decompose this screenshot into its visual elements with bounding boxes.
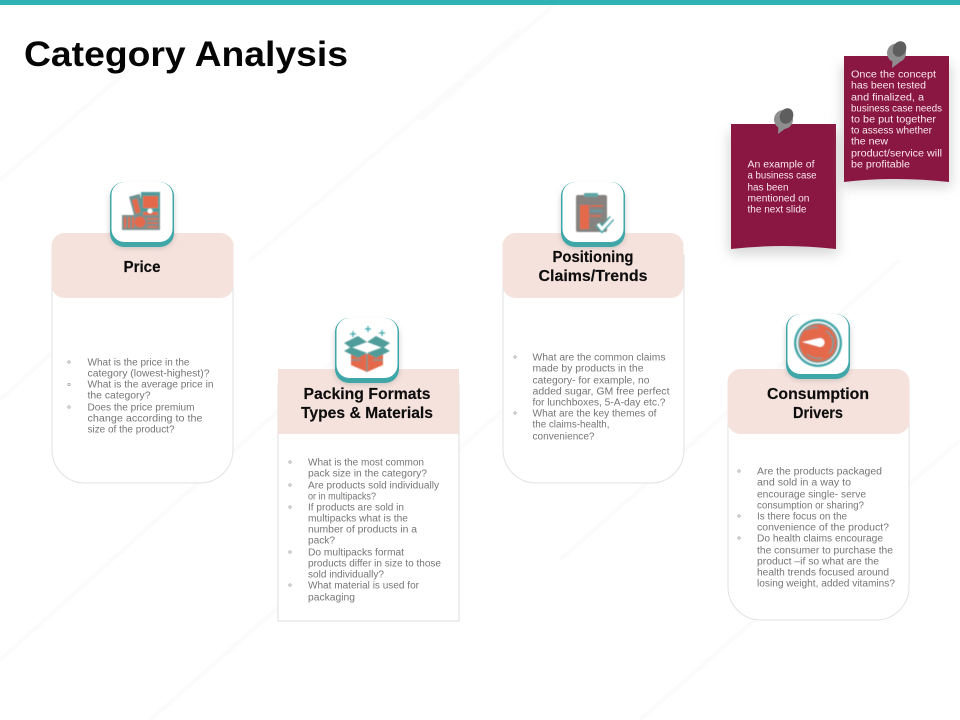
note text [748,160,817,216]
top accent bar [0,0,960,5]
text block: price questions: size of the product? [88,424,175,436]
text block: price questions: change according to the [88,414,203,424]
text block: consumption questions: encourage single- serve [757,490,866,500]
icon: money [110,182,174,248]
note text: Once the concept [851,70,936,80]
icon: pin [774,106,796,134]
text block: consumption questions: and sold in a way to [757,478,851,488]
text block: price questions: What is the price in the [88,358,190,368]
note text: the next slide [748,204,807,216]
title: Category Analysis [24,35,348,74]
text block: positioning questions: What are the common claims [532,352,666,364]
note text [851,70,942,170]
panel: price [52,182,234,483]
text block: positioning questions: category- for example, no [532,376,650,386]
heading: positioning claims [538,249,648,285]
text block: packing questions: Do multipacks format [308,548,404,558]
text block: positioning questions: added sugar, GM free perfect [532,386,670,398]
text block: packing questions [289,458,441,604]
panel: consumption drivers [728,314,910,620]
text block: consumption questions: Are the products packaged [757,466,882,478]
text block: consumption questions: product –if so what are the [757,556,879,568]
heading: positioning claims: Claims/Trends [538,268,648,285]
note text: product/service will [851,148,942,160]
text block: price questions [68,358,214,436]
note text: a business case [748,170,817,182]
text block: positioning questions: convenience? [532,432,595,442]
text block: packing questions: If products are sold in [308,502,404,514]
text block: positioning questions: What are the key themes of [532,408,657,420]
text block: consumption questions: Do health claims encourage [757,534,883,544]
text block: price questions: category (lowest-highest)? [88,368,210,380]
text block: price questions: the category? [88,390,151,402]
note text: mentioned on [748,194,810,204]
text block: consumption questions: consumption or sharing? [757,500,864,512]
heading: packing formats: Types & Materials [301,405,433,422]
text block: packing questions: multipacks what is the [308,514,408,524]
note text: the new [851,136,889,148]
text block: positioning questions [514,352,670,442]
text block: price questions: Does the price premium [88,402,194,414]
icon: clipboard [561,182,625,248]
text block: positioning questions: the claims-health, [532,420,610,430]
note text: to be put together [851,114,937,126]
text block: packing questions: What is the most common [308,458,424,468]
text block: packing questions: pack? [308,536,335,546]
text block: packing questions: or in multipacks? [308,492,376,502]
text block: price questions: What is the average price in [88,380,214,390]
text block: packing questions: packaging [308,592,355,604]
text block: consumption questions: health trends focused around [757,568,889,578]
icon: open box [335,318,399,384]
text block: consumption questions [738,466,895,590]
sticky note: concept finalized [842,39,951,187]
text block: packing questions: products differ in size to those [308,558,441,570]
text block: positioning questions: made by products in the [532,364,644,374]
text block: packing questions: Are products sold individually [308,480,439,492]
heading: consumption drivers: Consumption [767,386,869,403]
icon: gauge [786,314,850,380]
note text: An example of [748,160,815,170]
sticky note: business case example [729,106,838,254]
note text: has been [748,182,788,194]
heading: positioning claims: Positioning [552,249,634,266]
note text: has been tested [851,80,926,92]
note text: and finalized, a [851,92,924,104]
icon: pin [887,39,909,68]
heading: consumption drivers: Drivers [793,405,843,422]
text block: packing questions: What material is used for [308,580,420,592]
text block: positioning questions: for lunchboxes, 5-A-day etc.? [532,398,666,408]
note text: to assess whether [851,126,933,136]
text block: consumption questions: the consumer to purchase the [757,546,893,556]
text block: packing questions: number of products in a [308,524,417,536]
heading: packing formats: Packing Formats [304,386,431,403]
note text: business case needs [851,104,942,114]
heading: packing formats [301,386,433,422]
heading: price: Price [124,259,161,276]
text block: consumption questions: losing weight, added vitamins? [757,578,895,590]
text block: consumption questions: convenience of the product? [757,522,889,534]
text block: packing questions: pack size in the category? [308,468,427,480]
heading: consumption drivers [767,386,869,422]
note text: be profitable [851,160,910,170]
panel: packing formats [278,318,459,621]
panel: positioning claims [502,182,684,483]
text block: consumption questions: Is there focus on the [757,512,847,522]
text block: packing questions: sold individually? [308,570,384,580]
